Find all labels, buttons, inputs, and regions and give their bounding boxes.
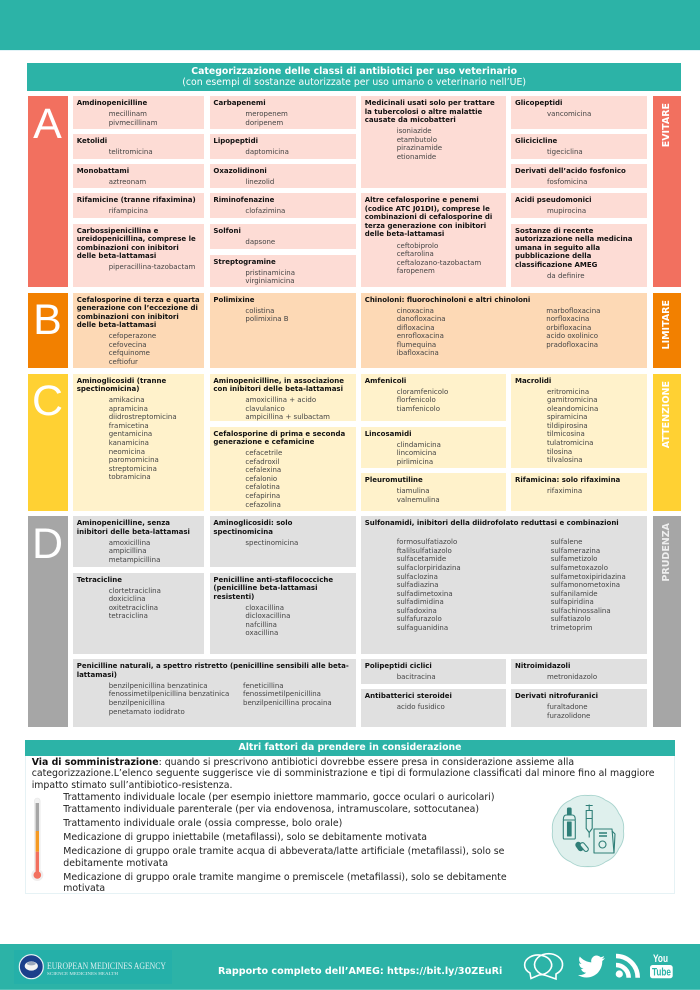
panel: Altre cefalosporine e penemi <box>361 193 506 287</box>
panel: Antibatterici steroidei: acido fusidico <box>397 703 445 711</box>
panel: Aminoglicosidi: streptomicina <box>109 465 157 473</box>
panel: Polimixine: colistina <box>245 307 274 315</box>
panel: Aminoglicosidi <box>73 374 204 511</box>
panel: Altre cefalosporine e penemi: (codice ATC J01DI), comprese le <box>365 205 490 213</box>
panel: Aminopenicilline senza inibitori: inibitori delle beta-lattamasi <box>77 528 190 536</box>
panel: Derivati dell'acido fosfonico: Derivati dell’acido fosfonico <box>515 167 626 175</box>
panel: Altre cefalosporine e penemi: delle beta-lattamasi <box>365 230 444 238</box>
panel: Tetracicline: doxiciclina <box>109 595 146 603</box>
panel: Amfenicoli: cloramfenicolo <box>397 388 448 396</box>
panel: Macrolidi: gamitromicina <box>547 396 598 404</box>
panel: Aminopenicilline senza inibitori: amoxicillina <box>109 539 150 547</box>
panel: Sulfonamidi: sulfadimetoxina <box>397 590 453 598</box>
category letter B <box>28 293 68 368</box>
panel: Penicilline naturali: Penicilline naturali, a spettro ristretto (penicilline sensibili alle beta- <box>77 662 349 670</box>
panel: Pleuromutiline: valnemulina <box>397 496 440 504</box>
panel: Solfoni <box>210 224 356 249</box>
panel: Altre cefalosporine e penemi: ceftobiprolo <box>397 242 438 250</box>
panel: Amfenicoli: tiamfenicolo <box>397 405 440 413</box>
panel: Derivati nitrofuranici: furaltadone <box>547 703 588 711</box>
panel: Chinoloni: cinoxacina <box>397 307 434 315</box>
panel: Derivati dell'acido fosfonico: fosfomicina <box>547 178 587 186</box>
panel: Penicilline anti-stafilococciche <box>210 573 356 654</box>
panel: Polimixine <box>210 293 356 368</box>
panel: Penicilline anti-stafilococciche: (penicilline beta-lattamasi <box>213 584 318 592</box>
panel: Cefalosporine terza e quarta generazione: delle beta-lattamasi <box>77 321 156 329</box>
panel: Glicopeptidi <box>511 96 647 129</box>
panel: Penicilline anti-stafilococciche: Penicilline anti-stafilococciche <box>213 576 333 584</box>
agency tagline: SCIENCE MEDICINES HEALTH <box>47 971 119 976</box>
route list item 4: Medicazione di gruppo iniettabile (metafilassi), solo se debitamente motivata <box>63 832 427 843</box>
panel: Derivati dell'acido fosfonico <box>511 164 647 188</box>
panel: Macrolidi <box>511 374 647 468</box>
panel: Medicinali tubercolosi: causate da micobatteri <box>365 116 456 124</box>
panel: Oxazolidinoni: Oxazolidinoni <box>213 167 267 175</box>
panel: Chinoloni: ibafloxacina <box>397 349 439 357</box>
panel: Glicopeptidi: vancomicina <box>547 110 591 118</box>
panel: Cefalosporine prima e seconda generazione <box>210 427 356 511</box>
route list item 3: Trattamento individuale orale (ossia compresse, bolo orale) <box>63 818 342 829</box>
panel: Cefalosporine prima e seconda generazione: cefalonio <box>245 475 277 483</box>
feed bag <box>594 829 615 853</box>
panel: Glicopeptidi: Glicopeptidi <box>515 99 562 107</box>
panel: Penicilline anti-stafilococciche: cloxacillina <box>245 604 284 612</box>
panel: Sulfonamidi: sulfachinossalina <box>551 607 611 615</box>
panel: Cefalosporine prima e seconda generazione: cefadroxil <box>245 458 280 466</box>
panel: Glicicicline <box>511 134 647 159</box>
panel: Tetracicline: tetraciclina <box>109 612 148 620</box>
panel: Altre cefalosporine e penemi: combinazioni di cefalosporine di <box>365 213 492 221</box>
panel: Cefalosporine terza e quarta generazione: combinazioni con inibitori <box>77 313 179 321</box>
panel: Streptogramine: virginiamicina <box>245 277 295 285</box>
panel: Cefalosporine prima e seconda generazione: cefalotina <box>245 483 280 491</box>
panel: Sulfonamidi: sulfafurazolo <box>397 615 442 623</box>
side label: ATTENZIONE <box>653 374 681 511</box>
panel: Aminoglicosidi: diidrostreptomicina <box>109 413 177 421</box>
panel: Sulfonamidi: sulfaguanidina <box>397 624 448 632</box>
panel: Sulfonamidi: sulfacetamide <box>397 555 446 563</box>
panel: Sulfonamidi: sulfaclorpiridazina <box>397 564 461 572</box>
panel: Medicinali tubercolosi <box>361 96 506 188</box>
route list item 5: debitamente motivata <box>63 858 168 869</box>
panel: Aminoglicosidi: kanamicina <box>109 439 149 447</box>
panel: Penicilline naturali <box>73 659 356 727</box>
panel: Chinoloni: orbifloxacina <box>546 324 591 332</box>
panel: Lipopeptidi <box>210 134 356 159</box>
panel: Aminoglicosidi: Aminoglicosidi (tranne <box>77 377 166 385</box>
panel: Sulfonamidi: sulfametoxipiridazina <box>551 573 626 581</box>
category letter B: B <box>33 296 62 344</box>
panel: Lincosamidi: lincomicina <box>397 449 436 457</box>
route list item 6: Medicazione di gruppo orale tramite mangime o premiscele (metafilassi), solo se debitamente <box>63 872 507 883</box>
panel: Aminoglicosidi solo spectinomicina <box>210 516 356 567</box>
intro text: categorizzazione.L’elenco seguente suggerisce vie di somministrazione e tipi di formulazione classificati dal minore fino al maggiore <box>32 768 655 779</box>
icon: RSS feed <box>616 954 640 978</box>
panel: Sostanze di recente autorizzazione: autorizzazione nella medicina <box>515 235 632 243</box>
section heading: Altri fattori da prendere in considerazione <box>238 742 461 753</box>
panel: Carbossipenicillina <box>73 224 204 287</box>
panel: Macrolidi: tilvalosina <box>547 456 583 464</box>
route list item 5 <box>63 846 504 869</box>
panel: Carbossipenicillina: delle beta-lattamasi <box>77 252 156 260</box>
panel: Glicicicline: Glicicicline <box>515 137 557 145</box>
panel: Tetracicline: Tetracicline <box>77 576 122 584</box>
panel: Tetracicline: oxitetraciclina <box>109 604 158 612</box>
panel: Streptogramine <box>210 255 356 287</box>
panel: Cefalosporine prima e seconda generazione: cefacetrile <box>245 449 282 457</box>
panel: Penicilline anti-stafilococciche: nafcillina <box>245 621 277 629</box>
panel: Sostanze di recente autorizzazione: classificazione AMEG <box>515 261 597 269</box>
panel: Altre cefalosporine e penemi: terza generazione con inibitori <box>365 222 486 230</box>
panel: Carbossipenicillina: ureidopenicillina, comprese le <box>77 235 196 243</box>
panel: Monobattami: Monobattami <box>77 167 129 175</box>
panel: Altre cefalosporine e penemi: Altre cefalosporine e penemi <box>365 196 479 204</box>
side label: EVITARE: EVITARE <box>661 103 672 147</box>
capsules <box>575 841 589 852</box>
panel: Sulfonamidi: sulfaclozina <box>397 573 438 581</box>
panel: Rifamicina <box>511 473 647 511</box>
panel: Penicilline naturali: feneticillina <box>243 682 284 690</box>
panel: Sulfonamidi: trimetoprim <box>551 624 592 632</box>
panel: Cefalosporine terza e quarta generazione <box>73 293 204 368</box>
panel: Ketolidi <box>73 134 204 159</box>
panel: Pleuromutiline: tiamulina <box>397 487 430 495</box>
panel: Chinoloni: flumequina <box>397 341 436 349</box>
panel: Tetracicline: clortetraciclina <box>109 587 161 595</box>
panel: Cefalosporine terza e quarta generazione: cefquinome <box>109 349 150 357</box>
panel: Aminoglicosidi: amikacina <box>109 396 144 404</box>
panel: Monobattami <box>73 164 204 188</box>
panel: Solfoni: Solfoni <box>213 227 241 235</box>
panel: Acidi pseudomonici: mupirocina <box>547 207 586 215</box>
panel: Amfenicoli: Amfenicoli <box>365 377 406 385</box>
panel: Amfenicoli <box>361 374 506 421</box>
syringe <box>586 804 593 838</box>
side label: EVITARE <box>653 96 681 287</box>
panel: Nitroimidazoli: Nitroimidazoli <box>515 662 570 670</box>
panel: Macrolidi: tildipirosina <box>547 422 588 430</box>
panel: Medicinali tubercolosi: Medicinali usati solo per trattare <box>365 99 495 107</box>
panel: Aminopenicilline con inibitori: ampicillina + sulbactam <box>245 413 330 421</box>
panel: Lipopeptidi: Lipopeptidi <box>213 137 258 145</box>
panel: Rifamicina: rifaximina <box>547 487 582 495</box>
panel: Sulfonamidi <box>361 516 647 654</box>
panel: Chinoloni: danofloxacina <box>397 315 446 323</box>
panel: Aminopenicilline senza inibitori: ampicillina <box>109 547 147 555</box>
panel: Altri fattori <box>25 740 675 894</box>
panel: Solfoni: dapsone <box>245 238 275 246</box>
panel: Amdinopenicilline: Amdinopenicilline <box>77 99 147 107</box>
side label: LIMITARE <box>653 293 681 368</box>
footer band <box>0 944 700 990</box>
panel: Aminopenicilline senza inibitori <box>73 516 204 567</box>
panel: Penicilline naturali: lattamasi) <box>77 671 117 679</box>
panel: Sulfonamidi: sulfamerazina <box>551 547 600 555</box>
route list item 1: Trattamento individuale locale (per esempio iniettore mammario, gocce oculari o auricolari) <box>63 792 494 803</box>
panel: Acidi pseudomonici: Acidi pseudomonici <box>515 196 592 204</box>
panel: Riminofenazine: clofazimina <box>245 207 285 215</box>
panel: Aminoglicosidi solo spectinomicina: spectinomicina <box>213 528 273 536</box>
panel: Polimixine: Polimixine <box>213 296 254 304</box>
panel: Rifamicine: rifampicina <box>109 207 148 215</box>
footer: EMA logo <box>18 954 166 980</box>
panel: Cefalosporine terza e quarta generazione: Cefalosporine di terza e quarta <box>77 296 200 304</box>
panel: Polipeptidi ciclici: bacitracina <box>397 673 436 681</box>
panel: Ketolidi: Ketolidi <box>77 137 107 145</box>
panel: Chinoloni: acido oxolinico <box>546 332 598 340</box>
panel: Penicilline naturali: penetamato iodidrato <box>109 708 185 716</box>
panel: Tetracicline <box>73 573 204 654</box>
category letter D <box>28 516 68 727</box>
panel: Cefalosporine prima e seconda generazione: cefazolina <box>245 501 281 509</box>
panel: Antibatterici steroidei: Antibatterici steroidei <box>365 692 452 700</box>
category letter C: C <box>32 377 63 425</box>
icon: YouTube <box>650 953 673 979</box>
panel: Sulfonamidi: sulfalene <box>551 538 582 546</box>
panel: Sostanze di recente autorizzazione: pubblicazione della <box>515 252 591 260</box>
icon: thermometer <box>32 798 44 881</box>
dropper bottle <box>563 808 575 839</box>
icon: medication forms badge <box>552 794 624 868</box>
panel: Amdinopenicilline <box>73 96 204 129</box>
footer: report link: Rapporto completo dell’AMEG: https://bit.ly/30ZEuRi <box>218 966 502 977</box>
category letter C <box>28 374 68 511</box>
icon: chat bubbles <box>524 952 564 980</box>
panel: Carbossipenicillina: combinazioni con inibitori <box>77 244 179 252</box>
panel: Carbossipenicillina: Carbossipenicillina e <box>77 227 158 235</box>
panel: Chinoloni: Chinoloni: fluorochinoloni e altri chinoloni <box>365 296 530 304</box>
panel: Nitroimidazoli: metronidazolo <box>547 673 597 681</box>
panel: Carbapenemi: doripenem <box>245 119 283 127</box>
panel: Sostanze di recente autorizzazione: umana in seguito alla <box>515 244 600 252</box>
panel: Pleuromutiline <box>361 473 506 511</box>
panel: Macrolidi: tilosina <box>547 448 572 456</box>
panel: Derivati nitrofuranici: Derivati nitrofuranici <box>515 692 598 700</box>
panel: Aminoglicosidi solo spectinomicina: spectinomicina <box>245 539 298 547</box>
panel: Cefalosporine terza e quarta generazione: ceftiofur <box>109 358 138 366</box>
panel: Lincosamidi: pirlimicina <box>397 458 433 466</box>
panel: Amfenicoli: florfenicolo <box>397 396 436 404</box>
title bar: (con esempi di sostanze autorizzate per uso umano o veterinario nell’UE) <box>182 77 526 88</box>
intro text: impatto stimato sull’antibiotico-resistenza. <box>32 780 232 790</box>
panel: Penicilline anti-stafilococciche: oxacillina <box>245 629 278 637</box>
panel: Chinoloni: pradofloxacina <box>546 341 598 349</box>
panel: Chinoloni <box>361 293 647 368</box>
panel: Amdinopenicilline: mecillinam <box>109 110 147 118</box>
panel: Sulfonamidi: sulfamonometoxina <box>551 581 620 589</box>
title bar: Categorizzazione delle classi di antibiotici per uso veterinario <box>191 66 517 77</box>
route list item 2: Trattamento individuale parenterale (per via endovenosa, intramuscolare, sottocutanea) <box>63 804 479 815</box>
panel: Chinoloni: marbofloxacina <box>546 307 600 315</box>
panel: Chinoloni: difloxacina <box>397 324 435 332</box>
panel: Sostanze di recente autorizzazione: Sostanze di recente <box>515 227 593 235</box>
panel: Sostanze di recente autorizzazione: da definire <box>547 272 585 280</box>
panel: Sulfonamidi: sulfametizolo <box>551 555 597 563</box>
route list item 5: Medicazione di gruppo orale tramite acqua di abbeverata/latte artificiale (metafilassi), solo se <box>63 846 504 857</box>
panel: Aminoglicosidi solo spectinomicina: Aminoglicosidi: solo <box>213 519 292 527</box>
panel: Medicinali tubercolosi: pirazinamide <box>397 144 442 152</box>
panel: Lincosamidi: Lincosamidi <box>365 430 411 438</box>
panel: Aminoglicosidi: apramicina <box>109 405 148 413</box>
panel: Pleuromutiline: Pleuromutiline <box>365 476 423 484</box>
panel: Glicicicline: tigeciclina <box>547 148 583 156</box>
panel: Macrolidi: tulatromicina <box>547 439 593 447</box>
panel: Cefalosporine terza e quarta generazione: cefovecina <box>109 341 147 349</box>
panel: Cefalosporine prima e seconda generazione: cefalexina <box>245 466 281 474</box>
route list item 6 <box>63 872 507 894</box>
panel: Macrolidi: Macrolidi <box>515 377 551 385</box>
panel: Aminoglicosidi: framicetina <box>109 422 149 430</box>
panel: Carbapenemi: Carbapenemi <box>213 99 266 107</box>
panel: Aminopenicilline con inibitori <box>210 374 356 421</box>
category letter A <box>28 96 68 287</box>
panel: Cefalosporine prima e seconda generazione: generazione e cefamicine <box>213 438 314 446</box>
panel: Lincosamidi: clindamicina <box>397 441 441 449</box>
panel: Aminopenicilline con inibitori: clavulanico <box>245 405 285 413</box>
panel: Medicinali tubercolosi: la tubercolosi o altre malattie <box>365 108 482 116</box>
side label: ATTENZIONE: ATTENZIONE <box>661 381 672 448</box>
panel: Cefalosporine prima e seconda generazione: Cefalosporine di prima e seconda <box>213 430 345 438</box>
panel: Polipeptidi ciclici: Polipeptidi ciclici <box>365 662 432 670</box>
panel: Aminopenicilline con inibitori: amoxicillina + acido <box>245 396 316 404</box>
panel: Altre cefalosporine e penemi: ceftarolina <box>397 250 434 258</box>
category letter D: D <box>32 520 63 568</box>
icon: twitter bird <box>578 956 605 978</box>
panel: Sulfonamidi: sulfapiridina <box>551 598 594 606</box>
panel: Monobattami: aztreonam <box>109 178 146 186</box>
panel: Penicilline naturali: benzilpenicillina <box>109 699 165 707</box>
panel: Sulfonamidi: sulfanilamide <box>551 590 598 598</box>
section heading <box>25 740 675 756</box>
panel: Streptogramine: pristinamicina <box>245 269 295 277</box>
panel: Nitroimidazoli <box>511 659 647 684</box>
panel: Streptogramine: Streptogramine <box>213 258 276 266</box>
panel: Aminopenicilline con inibitori: con inibitori delle beta-lattamasi <box>213 385 343 393</box>
panel: Altre cefalosporine e penemi: faropenem <box>397 267 435 275</box>
panel: Sulfonamidi: Sulfonamidi, inibitori della diidrofolato reduttasi e combinazioni <box>365 519 619 527</box>
panel: Aminoglicosidi: spectinomicina) <box>77 385 139 393</box>
panel: Aminopenicilline senza inibitori: Aminopenicilline, senza <box>77 519 170 527</box>
panel: Oxazolidinoni: linezolid <box>245 178 274 186</box>
panel: Aminopenicilline con inibitori: Aminopenicilline, in associazione <box>213 377 344 385</box>
panel: Sostanze di recente autorizzazione <box>511 224 647 287</box>
route list item 6: motivata <box>63 883 105 894</box>
panel: Rifamicina: Rifamicina: solo rifaximina <box>515 476 620 484</box>
panel: Polipeptidi ciclici <box>361 659 506 684</box>
panel: Chinoloni: enrofloxacina <box>397 332 444 340</box>
panel: Penicilline naturali: fenossimetilpenicillina benzatinica <box>109 690 229 698</box>
panel: Sulfonamidi: formosulfatiazolo <box>397 538 457 546</box>
panel: Chinoloni: norfloxacina <box>546 315 589 323</box>
panel: Lipopeptidi: daptomicina <box>245 148 289 156</box>
panel: Riminofenazine <box>210 193 356 218</box>
panel: Derivati nitrofuranici: furazolidone <box>547 712 590 720</box>
panel: Medicinali tubercolosi: etambutolo <box>397 136 437 144</box>
panel: Aminopenicilline senza inibitori: metampicillina <box>109 556 160 564</box>
panel: Macrolidi: eritromicina <box>547 388 589 396</box>
panel: Altre cefalosporine e penemi: ceftalozano-tazobactam <box>397 259 481 267</box>
panel: Sulfonamidi: sulfadimidina <box>397 598 444 606</box>
title bar <box>27 63 681 91</box>
panel: Carbossipenicillina: piperacillina-tazobactam <box>109 263 195 271</box>
panel: Aminoglicosidi: gentamicina <box>109 430 152 438</box>
panel: Cefalosporine prima e seconda generazione: cefapirina <box>245 492 280 500</box>
panel: Sulfonamidi: sulfadoxina <box>397 607 437 615</box>
panel: Antibatterici steroidei <box>361 689 506 727</box>
panel: Aminoglicosidi: neomicina <box>109 448 145 456</box>
panel: Aminoglicosidi: paromomicina <box>109 456 159 464</box>
panel: Rifamicine: Rifamicine (tranne rifaximina) <box>77 196 196 204</box>
side label: PRUDENZA <box>653 516 681 727</box>
panel: Medicinali tubercolosi: etionamide <box>397 153 436 161</box>
panel: Penicilline anti-stafilococciche: resistenti) <box>213 593 254 601</box>
panel: Cefalosporine terza e quarta generazione: cefoperazone <box>109 332 156 340</box>
panel: Amdinopenicilline: pivmecillinam <box>109 119 158 127</box>
intro text: Via di somministrazione: quando si prescrivono antibiotici dovrebbe essere presa in considerazione assieme alla <box>32 757 574 768</box>
panel: Sulfonamidi: sulfadiazina <box>397 581 438 589</box>
intro text <box>32 757 655 790</box>
panel: Acidi pseudomonici <box>511 193 647 218</box>
panel: Penicilline naturali: benzilpenicillina procaina <box>243 699 332 707</box>
panel: Derivati nitrofuranici <box>511 689 647 727</box>
side label: LIMITARE: LIMITARE <box>661 300 672 349</box>
panel: Carbapenemi: meropenem <box>245 110 288 118</box>
panel: Oxazolidinoni <box>210 164 356 188</box>
panel: Sulfonamidi: sulfametoxazolo <box>551 564 608 572</box>
panel: Macrolidi: oleandomicina <box>547 405 598 413</box>
panel: Penicilline naturali: benzilpenicillina benzatinica <box>109 682 208 690</box>
top banner <box>0 0 700 51</box>
panel: Penicilline naturali: fenossimetilpenicillina <box>243 690 321 698</box>
panel: Sulfonamidi: ftalilsulfatiazolo <box>397 547 452 555</box>
icon: YouTube: You <box>653 953 668 965</box>
panel: Carbapenemi <box>210 96 356 129</box>
panel: Penicilline anti-stafilococciche: dicloxacillina <box>245 612 290 620</box>
panel: Cefalosporine terza e quarta generazione: generazione con l’eccezione di <box>77 304 198 312</box>
panel: Macrolidi: tilmicosina <box>547 430 585 438</box>
category letter A: A <box>33 100 62 148</box>
panel: Riminofenazine: Riminofenazine <box>213 196 274 204</box>
panel: Ketolidi: telitromicina <box>109 148 153 156</box>
panel: Polimixine: polimixina B <box>245 315 289 323</box>
panel: Macrolidi: spiramicina <box>547 413 587 421</box>
panel: Sulfonamidi: sulfatiazolo <box>551 615 591 623</box>
side label: PRUDENZA: PRUDENZA <box>661 523 672 581</box>
panel: Lincosamidi <box>361 427 506 468</box>
panel: Medicinali tubercolosi: isoniazide <box>397 127 432 135</box>
panel: Rifamicine <box>73 193 204 218</box>
panel: Aminoglicosidi: tobramicina <box>109 473 151 481</box>
